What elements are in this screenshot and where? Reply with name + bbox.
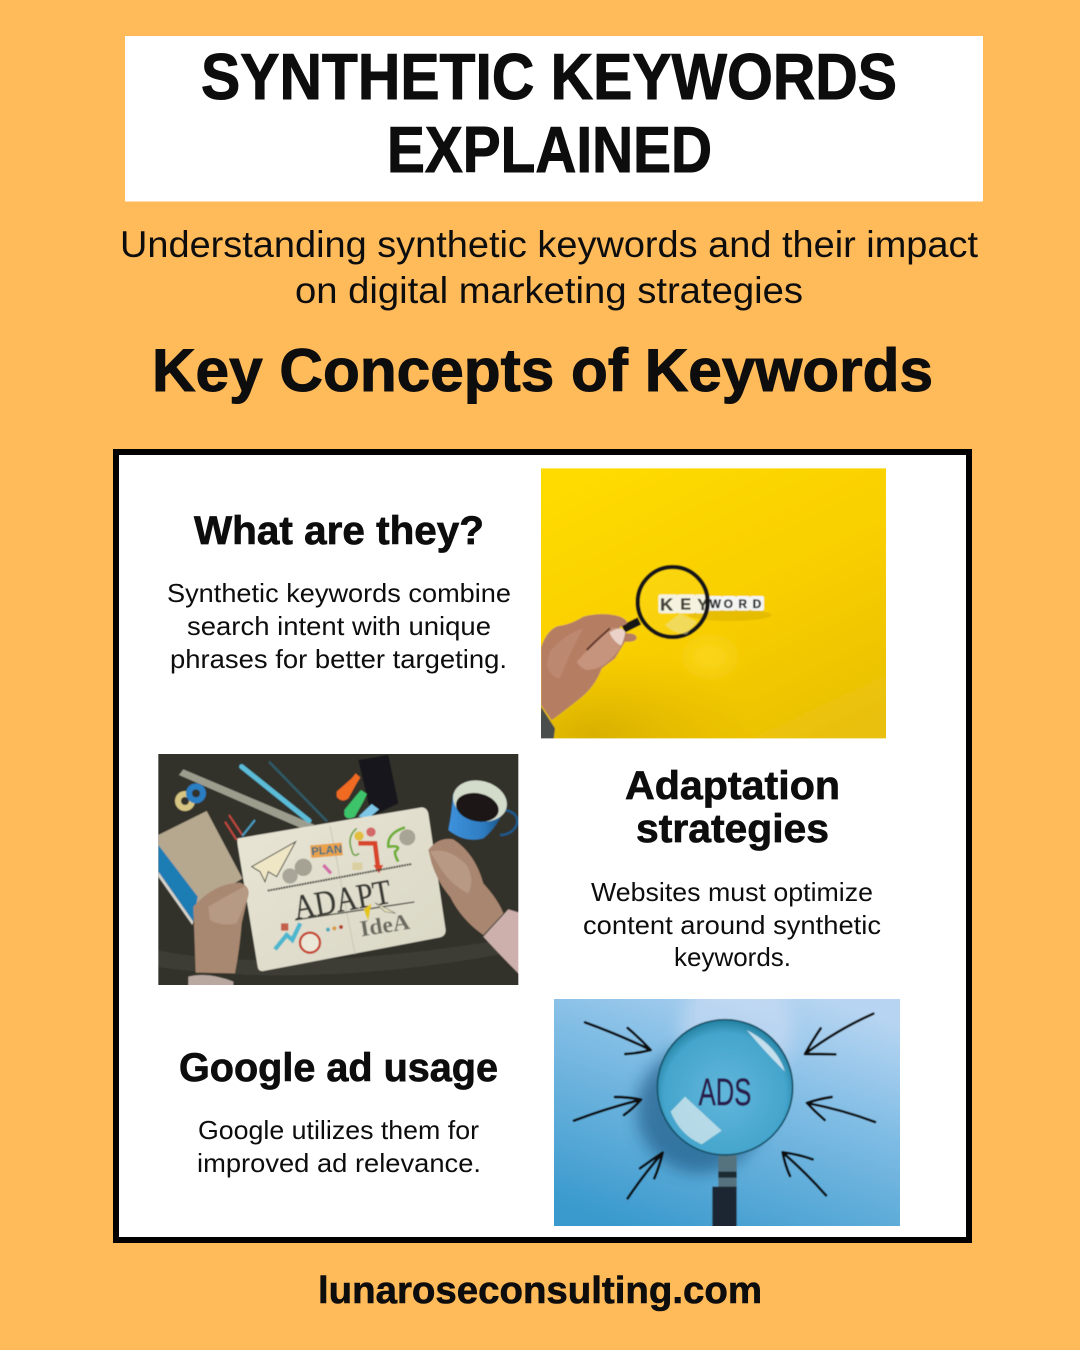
- photo: magnifier over keyword tiles: [538, 465, 890, 742]
- text block: what are they: [167, 509, 511, 674]
- text block: adaptation strategies: Websites must optimize: [591, 877, 873, 907]
- subtitle: Understanding synthetic keywords and their impact: [120, 224, 979, 265]
- photo: magnifier over keyword tiles: W: [710, 597, 722, 611]
- cup: [448, 793, 507, 840]
- photo: magnifier over keyword tiles: Y: [697, 597, 708, 614]
- text block: what are they: phrases for better targeting.: [170, 644, 507, 674]
- notebook: [237, 807, 446, 971]
- hand: [541, 614, 637, 720]
- pens: [242, 767, 309, 821]
- text block: google ad usage: Google ad usage: [179, 1046, 498, 1090]
- photo: magnifier over keyword tiles: R: [738, 597, 747, 611]
- footer url: lunaroseconsulting.com: [318, 1270, 762, 1312]
- adapt text: ADAPT: [290, 872, 394, 928]
- lens: [657, 1020, 793, 1155]
- title banner: EXPLAINED: [387, 113, 712, 186]
- photo: magnifier over keyword tiles: K: [660, 595, 673, 615]
- photo: adapt notebook: PLAN: [311, 844, 343, 858]
- lens: [638, 567, 708, 637]
- subtitle: [120, 224, 979, 311]
- photo: ads under magnifier: ADS: [699, 1072, 751, 1114]
- gears: [175, 791, 195, 811]
- text block: google ad usage: improved ad relevance.: [197, 1148, 481, 1178]
- title banner: [125, 36, 983, 202]
- notebook left: [158, 811, 242, 907]
- section heading: Key Concepts of Keywords: [152, 337, 933, 404]
- handle: [718, 1155, 737, 1188]
- arrows: [574, 1014, 875, 1198]
- paper clips: [225, 815, 242, 840]
- text block: adaptation strategies: strategies: [636, 807, 829, 851]
- lines: [268, 864, 412, 891]
- panel: key concepts: [116, 452, 969, 1240]
- text block: adaptation strategies: Adaptation: [625, 764, 840, 808]
- photo: magnifier over keyword tiles: E: [680, 597, 691, 614]
- subtitle: on digital marketing strategies: [295, 270, 803, 311]
- text block: adaptation strategies: keywords.: [674, 942, 791, 972]
- plane: [252, 842, 296, 882]
- text block: what are they: What are they?: [194, 509, 484, 553]
- text block: adaptation strategies: [583, 764, 881, 972]
- ruler: [179, 769, 315, 828]
- left hand: [193, 883, 249, 973]
- photo: ads under magnifier: [554, 999, 900, 1226]
- text block: what are they: Synthetic keywords combine: [167, 578, 511, 608]
- text block: google ad usage: Google utilizes them for: [198, 1115, 479, 1145]
- photo: magnifier over keyword tiles: O: [724, 597, 733, 611]
- sleeve: [483, 909, 522, 977]
- text block: what are they: search intent with unique: [187, 611, 491, 641]
- handle: [623, 621, 639, 629]
- tile shadow: [688, 609, 772, 621]
- right hand: [428, 839, 503, 935]
- plan tag: [310, 843, 343, 858]
- lower sketches: [275, 923, 300, 949]
- highlighters: [337, 773, 360, 800]
- text block: adaptation strategies: content around synthetic: [583, 910, 881, 940]
- photo: adapt notebook: IdeA: [358, 909, 412, 941]
- text block: google ad usage: [179, 1046, 498, 1178]
- photo: adapt notebook: [155, 750, 522, 988]
- photo: magnifier over keyword tiles: D: [753, 597, 762, 611]
- colored sketch: [358, 843, 378, 870]
- title banner: SYNTHETIC KEYWORDS: [201, 40, 897, 113]
- gears sketch: [282, 868, 298, 884]
